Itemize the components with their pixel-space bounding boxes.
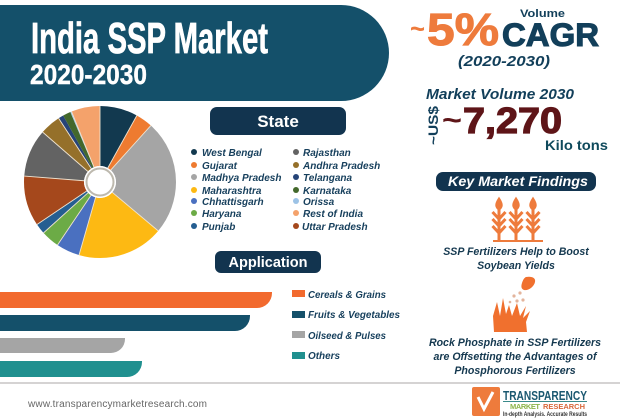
state legend: Karnataka [303, 186, 352, 197]
market volume callout [425, 87, 608, 153]
market volume callout: ~ [442, 104, 462, 137]
logo: MARKET [510, 402, 540, 411]
subtitle years: 2020-2030 [30, 59, 147, 90]
finding 2 text [429, 337, 601, 377]
state legend: Madhya Pradesh [202, 173, 281, 184]
finding 2 text: are Offsetting the Advantages of [433, 351, 598, 363]
state legend: Rest of India [303, 209, 363, 220]
CAGR callout: 5% [427, 4, 499, 55]
state heading [210, 107, 346, 135]
logo: TRANSPARENCY [503, 388, 587, 403]
pie chart: state shares [24, 106, 158, 255]
application legend: Fruits & Vegetables [308, 310, 400, 321]
state legend: Andhra Pradesh [302, 161, 380, 172]
finding 1 text: SSP Fertilizers Help to Boost [443, 246, 589, 258]
state legend [191, 148, 380, 233]
state legend: Maharashtra [202, 186, 262, 197]
state legend: Punjab [202, 222, 235, 233]
CAGR callout: (2020-2030) [458, 53, 550, 70]
title banner [0, 5, 389, 101]
website url: www.transparencymarketresearch.com [27, 399, 207, 410]
market volume callout: Market Volume 2030 [426, 87, 574, 103]
state legend: Telangana [303, 173, 353, 184]
logo: RESEARCH [543, 402, 585, 411]
state legend: Orissa [303, 197, 335, 208]
icon: fertilizer on crop [493, 277, 535, 332]
market volume callout: ~US$ [425, 106, 441, 145]
state legend: Gujarat [202, 161, 238, 172]
application legend [292, 290, 400, 362]
logo [472, 387, 587, 418]
CAGR callout: ~ [410, 13, 425, 44]
application heading: Application [229, 255, 307, 271]
state legend: West Bengal [202, 148, 262, 159]
state legend: Uttar Pradesh [302, 222, 368, 233]
finding 2 text: Phosphorous Fertilizers [454, 365, 576, 377]
CAGR callout [410, 4, 599, 70]
application legend: Cereals & Grains [308, 290, 386, 301]
finding 1 text: Soybean Yields [477, 260, 555, 272]
state legend: Haryana [202, 209, 242, 220]
logo: In-depth Analysis. Accurate Results [503, 411, 587, 418]
finding 2 text: Rock Phosphate in SSP Fertilizers [429, 337, 601, 349]
icon: wheat stalks [492, 198, 543, 241]
CAGR callout: CAGR [502, 17, 599, 53]
state heading: State [257, 112, 299, 131]
application legend: Oilseed & Pulses [308, 331, 386, 342]
finding 1 text [443, 246, 589, 272]
key findings heading: Key Market Findings [448, 174, 589, 189]
state legend: Rajasthan [303, 148, 351, 159]
state legend: Chhattisgarh [202, 197, 264, 208]
footer divider [0, 382, 620, 384]
CAGR callout: Volume [520, 8, 565, 20]
title: India SSP Market [31, 14, 268, 63]
bar chart: application [0, 292, 272, 377]
market volume callout: 7,270 [463, 100, 562, 141]
market volume callout: Kilo tons [545, 137, 608, 153]
key findings heading [436, 172, 596, 191]
application heading [215, 251, 321, 273]
application legend: Others [308, 351, 340, 362]
